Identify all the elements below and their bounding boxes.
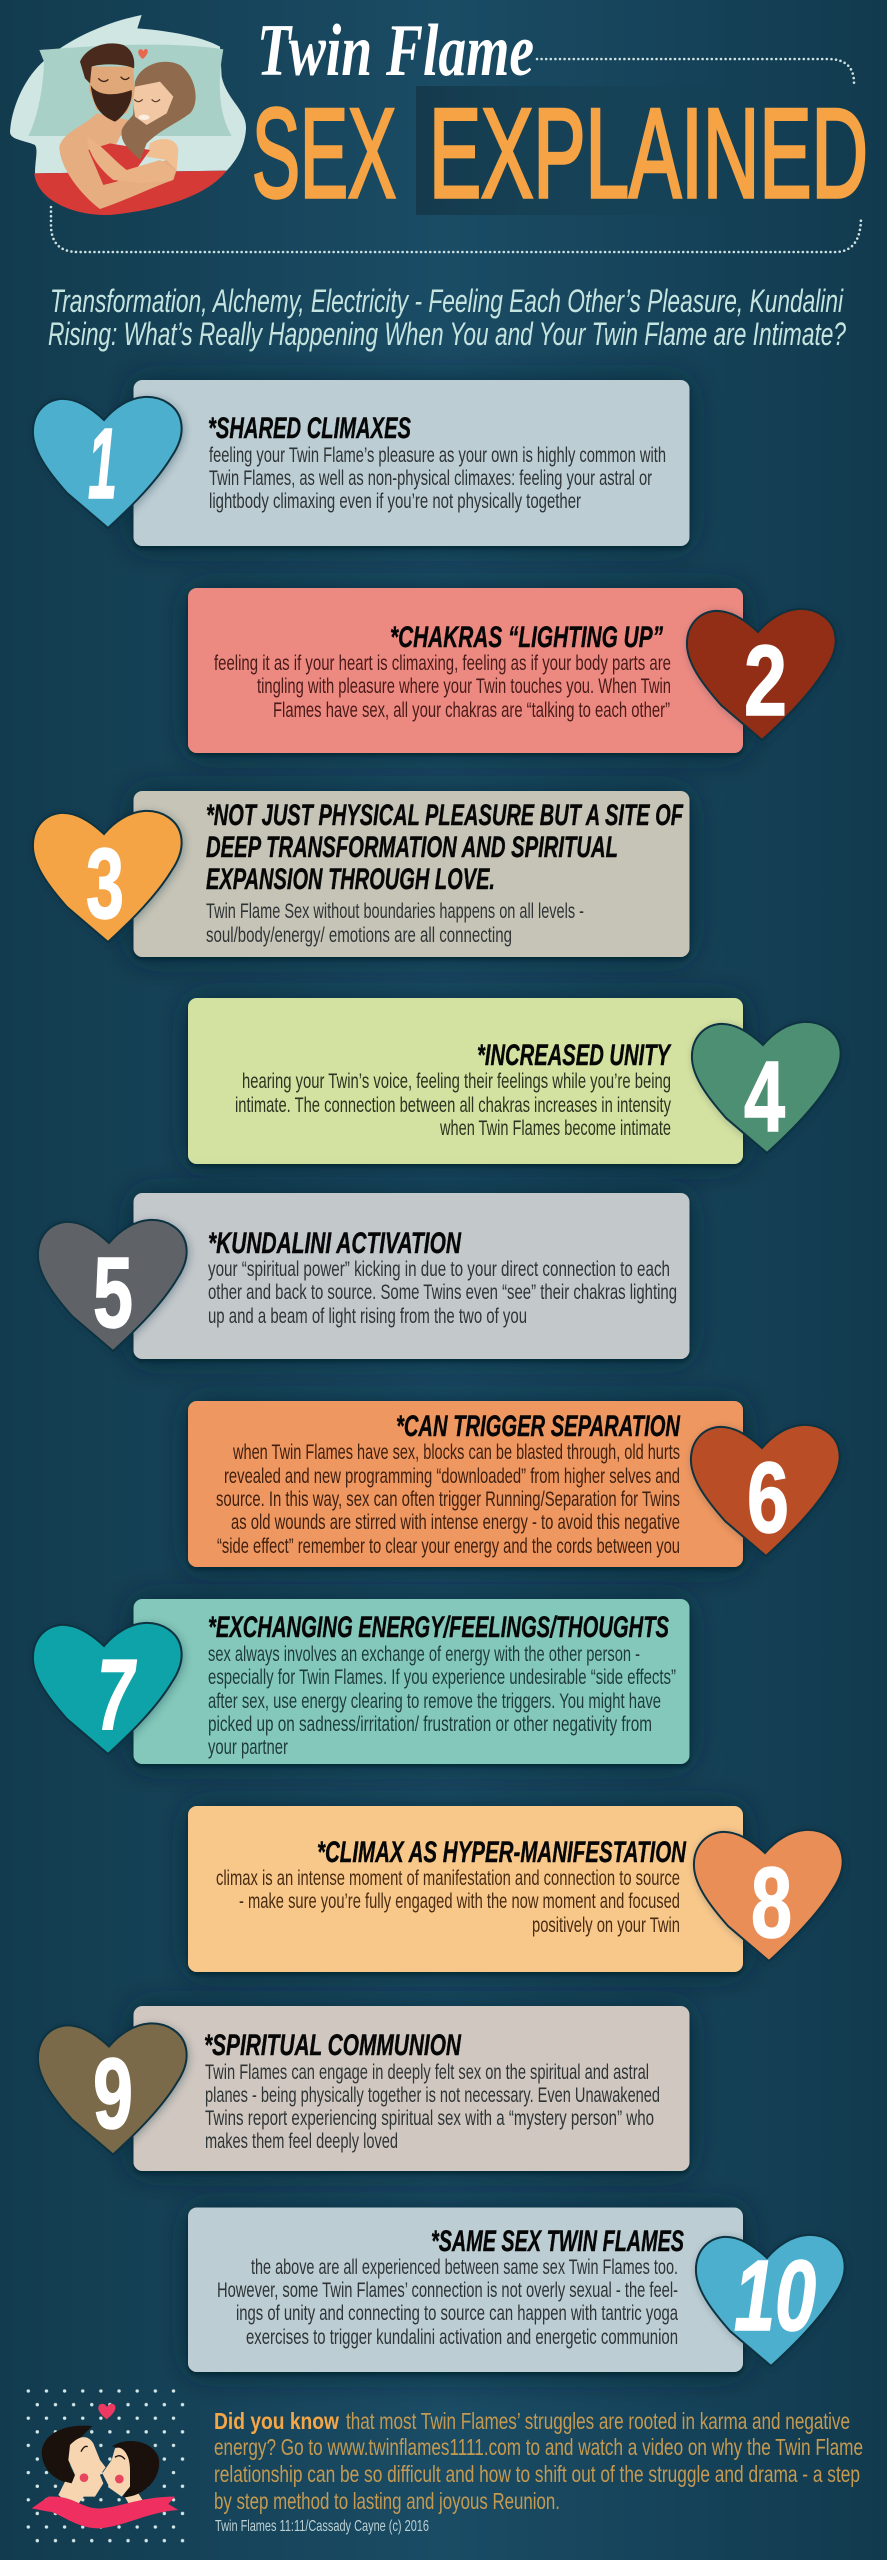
icon: kissing couple with ribbon and dots — [24, 2386, 187, 2550]
body: when Twin Flames have sex, blocks can be blasted through, old hurts — [232, 1441, 680, 1464]
card — [188, 588, 743, 753]
body: when Twin Flames become intimate — [439, 1117, 671, 1140]
body: source. In this way, sex can often trigger Running/Separation for Twins — [216, 1488, 680, 1511]
did you know text — [214, 2408, 863, 2514]
did you know text: by step method to lasting and joyous Reunion. — [214, 2488, 560, 2514]
heart 5 — [38, 1220, 187, 1351]
body: climax is an intense moment of manifestation and connection to source — [216, 1867, 680, 1890]
body: as old wounds are stirred with intense energy - to avoid this negative — [231, 1511, 680, 1534]
panel 2: chakras lighting up — [188, 588, 836, 753]
number 9: 9 — [93, 2038, 133, 2150]
body — [214, 652, 671, 722]
card — [188, 2208, 743, 2372]
body: exercises to trigger kundalini activation and energetic communion — [246, 2326, 678, 2349]
heading — [206, 799, 683, 896]
body: However, some Twin Flames’ connection is not overly sexual - the feel- — [217, 2279, 678, 2302]
body: Twin Flame Sex without boundaries happens on all levels - — [206, 900, 584, 923]
card — [134, 1599, 690, 1764]
heading: *CAN TRIGGER SEPARATION — [396, 1410, 681, 1443]
body — [216, 1867, 680, 1937]
body: your “spiritual power” kicking in due to your direct connection to each — [208, 1258, 670, 1281]
panel 8: climax as hyper-manifestation — [188, 1806, 843, 1972]
body: sex always involves an exchange of energy with the other person - — [208, 1643, 640, 1666]
panel 3: site of deep transformation — [33, 791, 690, 957]
card — [188, 1401, 743, 1567]
panel 9: spiritual communion — [38, 2006, 690, 2171]
heart 4 — [692, 1022, 841, 1153]
heart 8 — [694, 1830, 843, 1961]
heading: *SHARED CLIMAXES — [208, 412, 411, 445]
heading: *SPIRITUAL COMMUNION — [204, 2029, 462, 2062]
body: lightbody climaxing even if you’re not physically together — [209, 490, 581, 513]
body — [217, 2256, 678, 2349]
body: other and back to source. Some Twins even “see” their chakras lighting — [208, 1281, 677, 1304]
number 5: 5 — [93, 1237, 133, 1349]
number 7: 7 — [97, 1639, 137, 1751]
body: Flames have sex, all your chakras are “talking to each other” — [273, 699, 670, 722]
footer — [24, 2386, 863, 2550]
card — [134, 791, 690, 957]
body — [216, 1441, 680, 1558]
panel 1: shared climaxes — [33, 380, 690, 546]
illustration: embracing couple in bed — [10, 15, 246, 215]
body: picked up on sadness/irritation/ frustration or other negativity from — [208, 1713, 652, 1736]
body: intimate. The connection between all chakras increases in intensity — [235, 1094, 671, 1117]
heading: *INCREASED UNITY — [477, 1039, 672, 1072]
subtitle — [48, 283, 846, 352]
panel 10: same sex twin flames — [188, 2208, 845, 2372]
heart 3 — [33, 811, 182, 942]
card — [134, 2006, 690, 2171]
did you know text: Did you know — [214, 2408, 340, 2434]
body: Twin Flames can engage in deeply felt sex on the spiritual and astral — [205, 2061, 649, 2084]
body — [206, 900, 584, 947]
body: - make sure you’re fully engaged with the now moment and focused — [239, 1890, 680, 1913]
heading: *CLIMAX AS HYPER-MANIFESTATION — [317, 1836, 687, 1869]
heart 9 — [38, 2023, 187, 2154]
panel 6: can trigger separation — [188, 1401, 840, 1567]
body: your partner — [208, 1736, 288, 1759]
credit: Twin Flames 11:11/Cassady Cayne (c) 2016 — [215, 2518, 429, 2535]
number 3: 3 — [86, 828, 124, 940]
body: especially for Twin Flames. If you experience undesirable “side effects” — [208, 1666, 676, 1689]
number 8: 8 — [751, 1847, 792, 1959]
body: positively on your Twin — [532, 1914, 680, 1937]
body: tingling with pleasure where your Twin touches you. When Twin — [257, 675, 671, 698]
heading: *CHAKRAS “LIGHTING UP” — [390, 621, 663, 654]
number 2: 2 — [744, 625, 787, 737]
heart 1 — [33, 397, 182, 528]
body: revealed and new programming “downloaded” from higher selves and — [224, 1465, 680, 1488]
body: after sex, use energy clearing to remove the triggers. You might have — [208, 1690, 661, 1713]
heading: *KUNDALINI ACTIVATION — [208, 1227, 462, 1260]
title: Twin Flame: Twin Flame — [257, 10, 534, 92]
title: SEX: SEX — [252, 82, 396, 224]
body: Twin Flames, as well as non-physical climaxes: feeling your astral or — [209, 467, 652, 490]
body: soul/body/energy/ emotions are all connecting — [206, 924, 512, 947]
body — [205, 2061, 660, 2153]
body — [208, 1258, 677, 1328]
body: the above are all experienced between same sex Twin Flames too. — [251, 2256, 678, 2279]
heart 6 — [691, 1425, 840, 1556]
number 1: 1 — [88, 408, 117, 520]
body: planes - being physically together is not necessary. Even Unawakened — [205, 2084, 660, 2107]
body: feeling it as if your heart is climaxing, feeling as if your body parts are — [214, 652, 671, 675]
header — [10, 10, 868, 252]
heading: *EXCHANGING ENERGY/FEELINGS/THOUGHTS — [208, 1611, 669, 1644]
card — [134, 380, 690, 546]
card — [188, 1806, 743, 1972]
body: ings of unity and connecting to source can happen with tantric yoga — [236, 2302, 678, 2325]
body: hearing your Twin’s voice, feeling their feelings while you’re being — [242, 1070, 671, 1093]
body: feeling your Twin Flame’s pleasure as your own is highly common with — [209, 444, 666, 467]
heading: *SAME SEX TWIN FLAMES — [431, 2225, 684, 2258]
heading: EXPANSION THROUGH LOVE. — [206, 863, 495, 896]
body — [208, 1643, 676, 1759]
heading: DEEP TRANSFORMATION AND SPIRITUAL — [206, 831, 618, 864]
body — [235, 1070, 671, 1140]
number 6: 6 — [747, 1442, 789, 1554]
card — [134, 1193, 690, 1359]
panel 5: kundalini activation — [38, 1193, 690, 1359]
heart 7 — [33, 1623, 182, 1754]
heart 10 — [696, 2235, 845, 2366]
body: makes them feel deeply loved — [205, 2130, 398, 2153]
body — [209, 444, 666, 513]
body: Twins report experiencing spiritual sex with a “mystery person” who — [205, 2107, 654, 2130]
number 10: 10 — [734, 2240, 816, 2352]
dark box behind EXPLAINED — [416, 86, 868, 215]
body: up and a beam of light rising from the two of you — [208, 1305, 527, 1328]
heart 2 — [687, 609, 836, 740]
panel 4: increased unity — [188, 998, 841, 1164]
dotted frame — [51, 59, 861, 252]
body: “side effect” remember to clear your energy and the cords between you — [217, 1535, 680, 1558]
number 4: 4 — [744, 1041, 785, 1153]
panel 7: exchanging energy — [33, 1599, 690, 1764]
card — [188, 998, 743, 1164]
